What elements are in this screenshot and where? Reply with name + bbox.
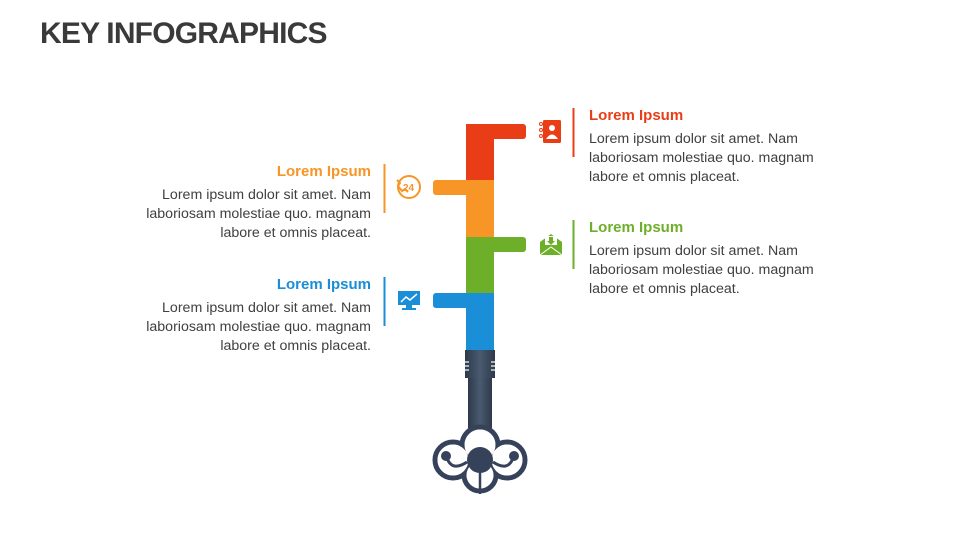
text block: right 1: Lorem ipsum dolor sit amet. Nam laboriosam molestiae quo. magnam labore et omnis placeat. — [589, 131, 814, 185]
icon: 24h phone: 24 — [403, 183, 415, 194]
text block: left 1: Lorem Ipsum — [277, 163, 371, 180]
title: KEY INFOGRAPHICS — [40, 17, 327, 50]
text block: right 1: Lorem Ipsum — [589, 107, 683, 124]
icon: 24h phone — [397, 176, 420, 198]
segment: blue — [433, 293, 494, 350]
icon: contact book — [540, 120, 561, 143]
text block: left 2: Lorem Ipsum — [277, 276, 371, 293]
icon: envelope download — [540, 234, 562, 255]
text block: left 1 — [146, 163, 371, 241]
segment: orange — [433, 180, 494, 237]
key handle — [435, 350, 525, 494]
text block: right 1 — [589, 107, 814, 185]
text block: left 2 — [146, 276, 371, 354]
text block: right 2 — [589, 219, 814, 297]
text block: right 2: Lorem Ipsum — [589, 219, 683, 236]
text block: left 2: Lorem ipsum dolor sit amet. Nam laboriosam molestiae quo. magnam labore et omnis placeat. — [146, 300, 371, 354]
segment: red — [466, 124, 526, 180]
text block: right 2: Lorem ipsum dolor sit amet. Nam laboriosam molestiae quo. magnam labore et omnis placeat. — [589, 243, 814, 297]
icon: monitor chart — [398, 291, 420, 310]
text block: left 1: Lorem ipsum dolor sit amet. Nam laboriosam molestiae quo. magnam labore et omnis placeat. — [146, 187, 371, 241]
dividers — [572, 108, 574, 157]
segment: green — [466, 237, 526, 293]
